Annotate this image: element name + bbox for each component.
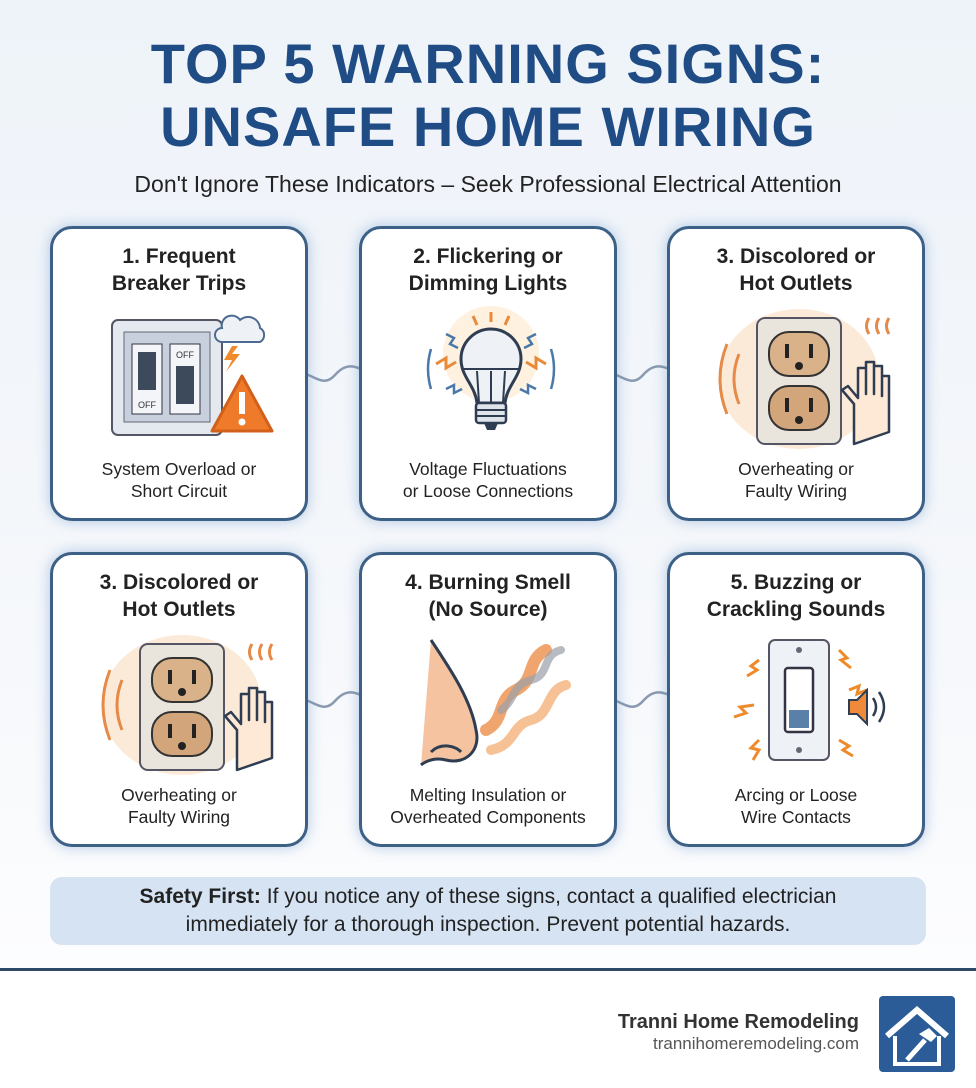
heading: [707, 571, 885, 621]
panel: hot outlets (bottom): [50, 552, 308, 847]
description: Faulty Wiring: [745, 481, 847, 501]
callout: safety first: immediately for a thorough inspection. Prevent potential hazards.: [186, 913, 790, 936]
icon: breaker panel: OFF: [176, 350, 194, 360]
heading: [112, 245, 246, 295]
heading: 5. Buzzing or: [731, 571, 861, 594]
heading: 3. Discolored or: [717, 245, 875, 268]
footer brand text: Tranni Home Remodeling: [618, 1011, 859, 1033]
description: Overheating or: [738, 459, 854, 479]
heading: Dimming Lights: [409, 272, 567, 295]
description: Short Circuit: [131, 481, 227, 501]
heading: 2. Flickering or: [413, 245, 563, 268]
title: UNSAFE HOME WIRING: [160, 95, 816, 158]
icon: breaker panel: OFF: [138, 400, 156, 410]
description: or Loose Connections: [403, 481, 573, 501]
description: [390, 785, 586, 827]
description: Wire Contacts: [741, 807, 851, 827]
heading: 1. Frequent: [122, 245, 236, 268]
footer brand text: trannihomeremodeling.com: [653, 1034, 859, 1053]
heading: [409, 245, 567, 295]
icon: switch with sound: [734, 639, 886, 761]
description: Arcing or Loose: [735, 785, 857, 805]
heading: [100, 571, 258, 621]
icon: hot outlet: [718, 309, 890, 449]
description: [102, 459, 256, 501]
description: Voltage Fluctuations: [409, 459, 567, 479]
heading: Breaker Trips: [112, 272, 246, 295]
description: [738, 459, 854, 501]
icon: hot outlet: [102, 635, 274, 775]
panel: burning smell: [359, 552, 617, 847]
description: Overheating or: [121, 785, 237, 805]
icon: light bulb: [426, 306, 556, 430]
callout: safety first: Safety First: If you notice any of these signs, contact a qualified electrician: [140, 885, 836, 908]
description: [734, 785, 857, 827]
heading: 3. Discolored or: [100, 571, 258, 594]
heading: Hot Outlets: [739, 272, 853, 295]
heading: 4. Burning Smell: [405, 571, 571, 594]
subtitle: Don't Ignore These Indicators – Seek Professional Electrical Attention: [134, 171, 842, 197]
description: [403, 459, 573, 501]
description: Overheated Components: [390, 807, 586, 827]
title: [151, 32, 825, 158]
callout: safety first: [50, 877, 926, 945]
heading: [717, 245, 875, 295]
panel: hot outlets (top): [667, 226, 925, 521]
icon: breaker panel: [111, 314, 274, 436]
heading: (No Source): [428, 598, 548, 621]
description: Melting Insulation or: [410, 785, 566, 805]
panel: buzzing sounds: [667, 552, 925, 847]
logo: house with hammer: [879, 996, 955, 1072]
description: [121, 785, 237, 827]
heading: Hot Outlets: [122, 598, 236, 621]
heading: Crackling Sounds: [707, 598, 885, 621]
icon: nose with smoke: [420, 639, 571, 766]
panel: flickering lights: [359, 226, 617, 521]
footer brand text: [618, 1011, 859, 1053]
heading: [405, 571, 571, 621]
description: System Overload or: [102, 459, 256, 479]
description: Faulty Wiring: [128, 807, 230, 827]
title: TOP 5 WARNING SIGNS:: [151, 32, 825, 95]
panel: breaker trips: [50, 226, 308, 521]
